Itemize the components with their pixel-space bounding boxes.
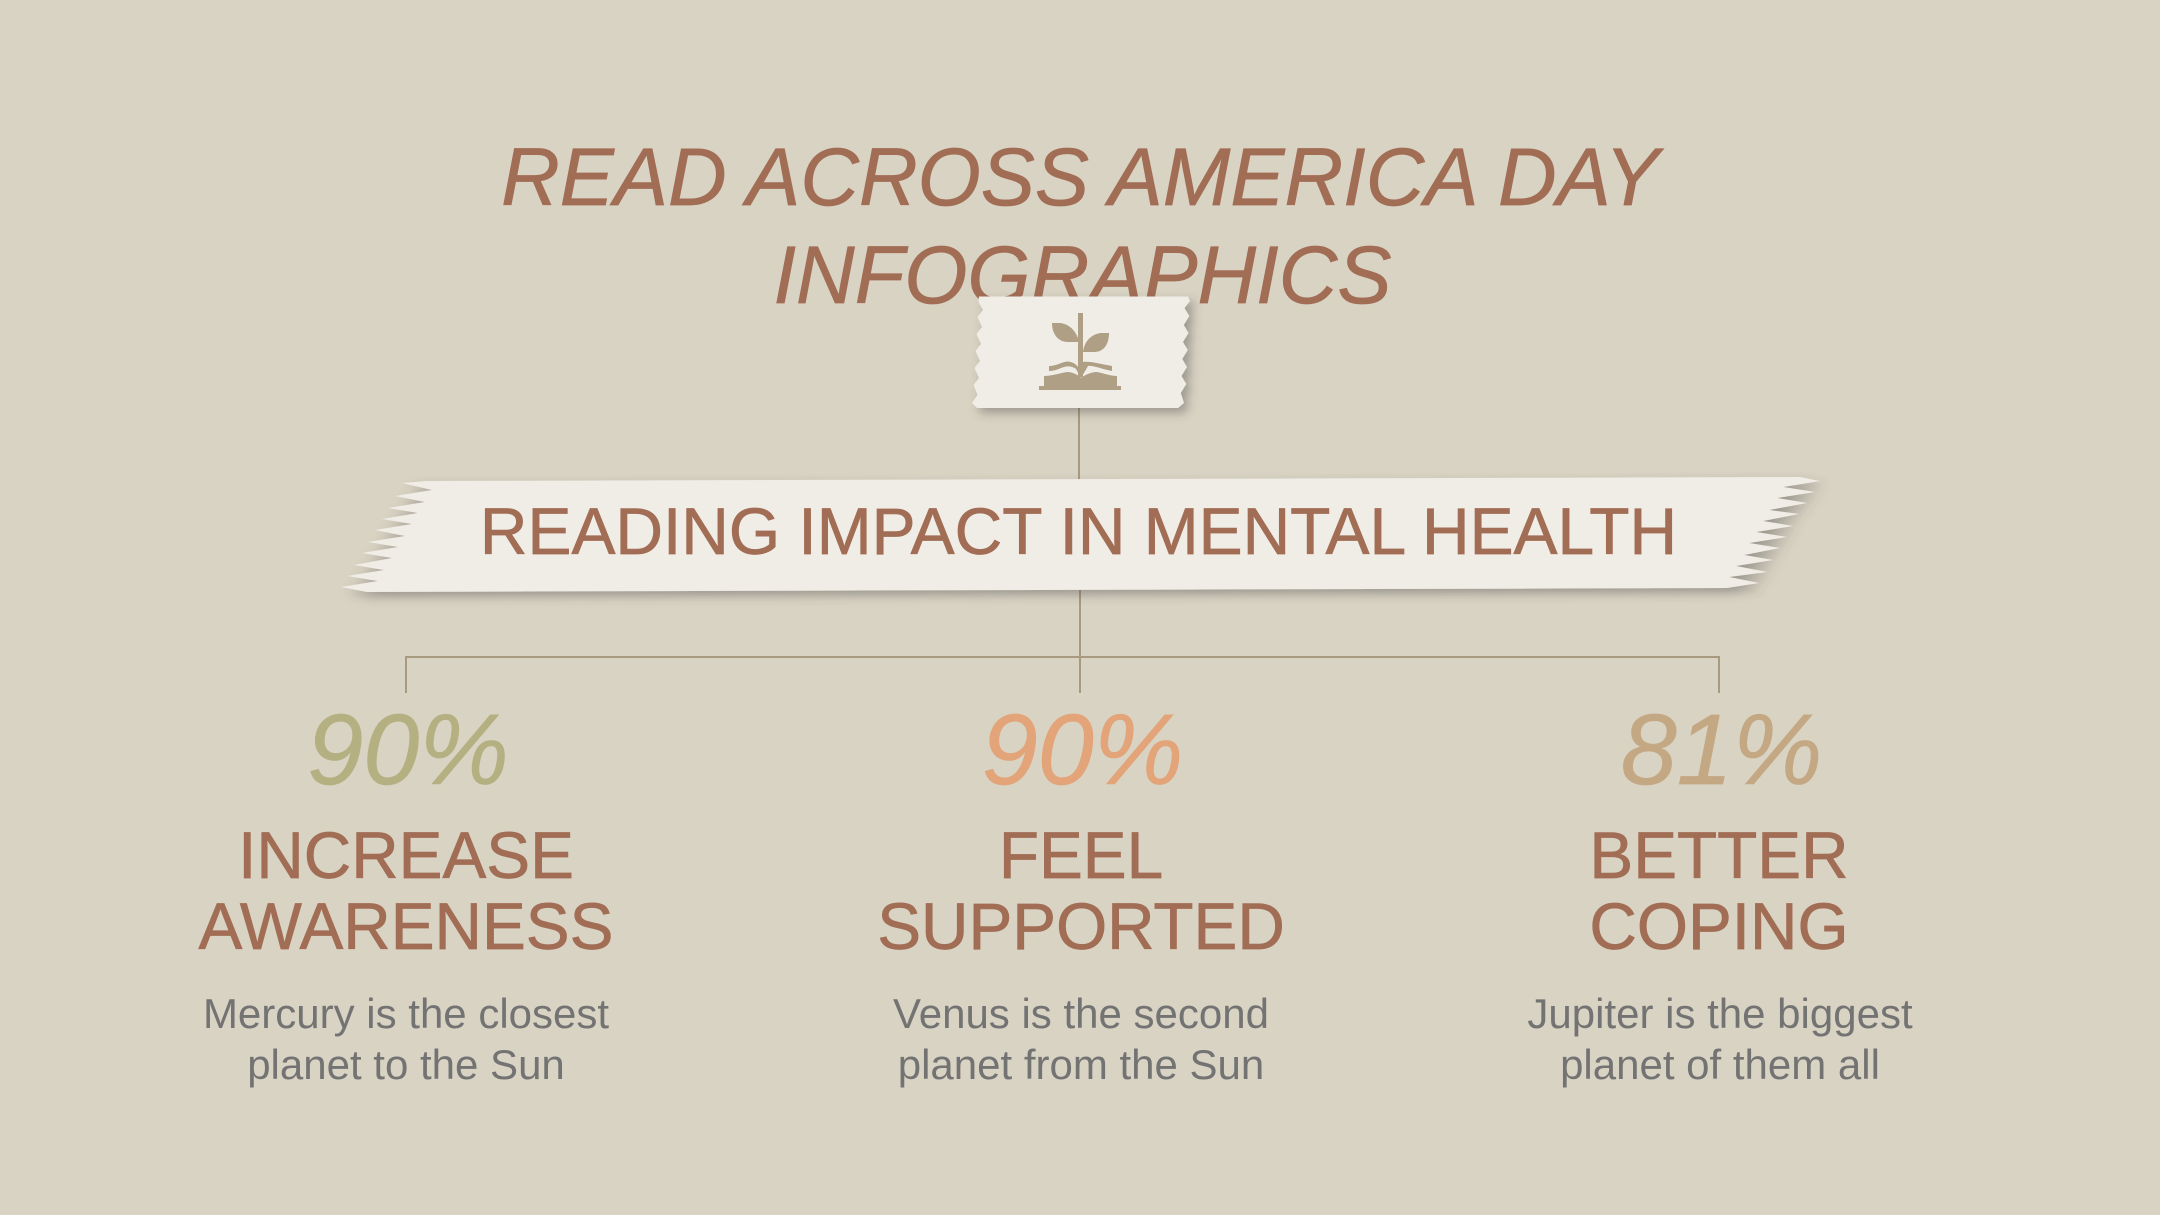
column: better coping: [1527, 694, 1913, 1088]
description: Venus is the second: [893, 990, 1269, 1037]
column: better coping: planet of them all: [1560, 1041, 1880, 1088]
heading: FEEL: [999, 819, 1163, 892]
banner tape: [341, 477, 1820, 592]
icon tape: [972, 296, 1190, 408]
title: INFOGRAPHICS: [774, 231, 1391, 321]
heading: INCREASE: [238, 819, 574, 892]
column: feel supported: SUPPORTED: [877, 890, 1285, 963]
column: increase awareness: [199, 694, 613, 1088]
heading: BETTER: [1589, 819, 1849, 892]
column: increase awareness: AWARENESS: [199, 890, 613, 963]
stat 81%: 81%: [1621, 694, 1822, 806]
stat 90%: 90%: [307, 694, 509, 806]
title: READ ACROSS AMERICA DAY: [501, 133, 1665, 223]
description: Mercury is the closest: [203, 990, 609, 1037]
banner heading: READING IMPACT IN MENTAL HEALTH: [480, 494, 1677, 568]
column: feel supported: planet from the Sun: [898, 1041, 1264, 1088]
column: increase awareness: planet to the Sun: [247, 1041, 565, 1088]
description: Jupiter is the biggest: [1527, 990, 1913, 1037]
icon: book with sprout: [1039, 313, 1121, 390]
column: feel supported: [877, 694, 1285, 1088]
column: better coping: COPING: [1589, 890, 1849, 963]
stat 90%: 90%: [982, 694, 1183, 806]
title: [501, 133, 1665, 321]
